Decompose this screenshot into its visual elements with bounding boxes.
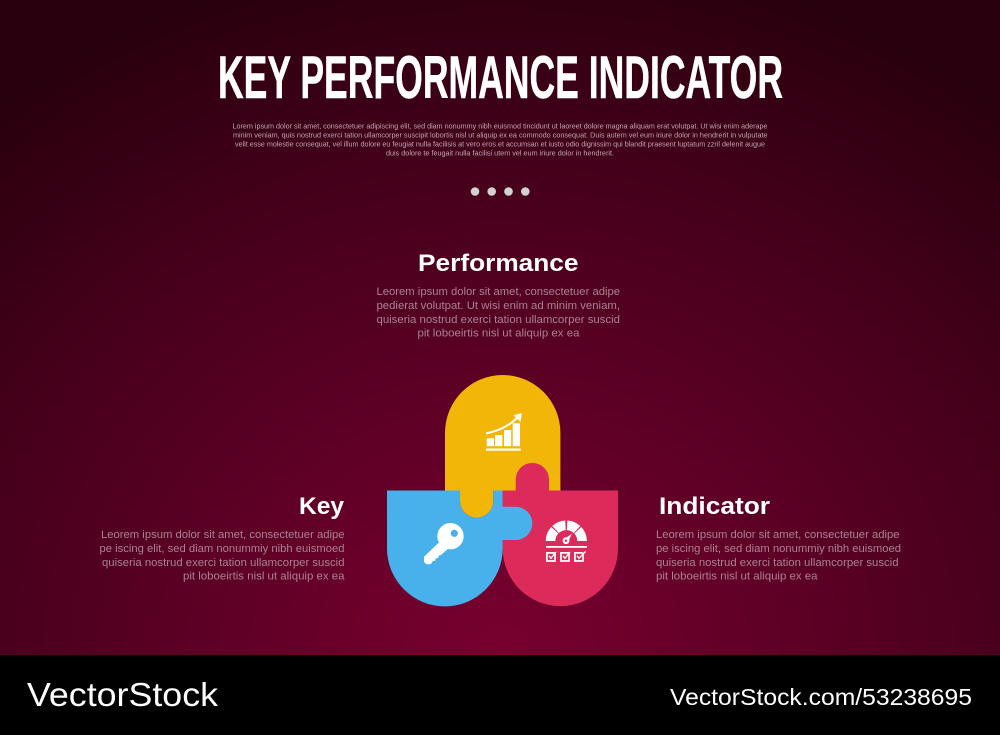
panel: Performance text [376,250,620,340]
text block: Performance description [376,286,620,340]
footer bar [0,655,1000,735]
text block: Key description: Leorem ipsum dolor sit amet, consectetuer adipe [101,529,344,541]
text block: Indicator description: Leorem ipsum dolor sit amet, consectetuer adipe [656,529,900,541]
text block: Performance description: pedierat volutpat. Ut wisi enim ad minim veniam, [376,300,620,312]
heading: Indicator: Indicator [659,493,770,520]
intro paragraph: velit esse molestie consequat, vel illum dolore eu feugiat nulla facilisis at vero eros et accumsan et iusto odio dignissim qui blandit praesent luptatum zzril delenit augue [235,140,765,148]
panel: Key text [100,493,345,582]
icon: gauge with checklist [546,525,587,561]
intro paragraph: duis dolore te feugait nulla facilisi utem vel eum iriure dolor in hendrerit. [386,148,614,158]
puzzle piece: Indicator (red) [503,463,618,606]
text block: Key description: pit loboeirtis nisl ut aliquip ex ea [183,570,345,582]
text block: Performance description: Leorem ipsum dolor sit amet, consectetuer adipe [376,286,620,298]
text block: Indicator description: pe iscing elit, sed diam nonummiy nibh euismoed [656,543,901,555]
panel: Indicator text [656,493,901,582]
heading: Performance: Performance [418,250,578,277]
heading: Key: Key [299,493,345,520]
puzzle piece: Key (blue) [387,490,532,606]
intro paragraph: Lorem ipsum dolor sit amet, consectetuer adipiscing elit, sed diam nonummy nibh euismod tincidunt ut laoreet dolore magna aliquam erat volutpat. Ut wisi enim aderape [232,122,768,130]
intro paragraph: minim veniam, quis nostrud exerci tation ullamcorper suscipit lobortis nisl ut aliquip ex ea commodo consequat. Duis autem vel eum iriure dolor in hendrerit in vulputate [233,130,768,140]
text block: Key description [100,529,345,582]
text block: Indicator description: pit loboeirtis nisl ut aliquip ex ea [656,570,818,582]
pagination dots [471,187,530,196]
text block: Indicator description [656,529,901,582]
text block: Indicator description: quiseria nostrud exerci tation ullamcorper suscid [656,557,898,569]
puzzle diagram [387,375,618,606]
footer bar: VectorStock [27,676,219,713]
text block: Performance description: pit loboeirtis nisl ut aliquip ex ea [418,328,580,340]
intro paragraph [232,122,768,158]
puzzle piece: Performance (yellow) [445,375,560,518]
icon: key [424,523,464,564]
icon: growth chart [486,413,522,451]
text block: Key description: quiseria nostrud exerci tation ullamcorper suscid [102,557,344,569]
text block: Performance description: quiseria nostrud exerci tation ullamcorper suscid [376,314,620,326]
text block: Key description: pe iscing elit, sed diam nonummiy nibh euismoed [100,543,344,555]
footer bar: VectorStock.com/53238695 [670,684,972,710]
